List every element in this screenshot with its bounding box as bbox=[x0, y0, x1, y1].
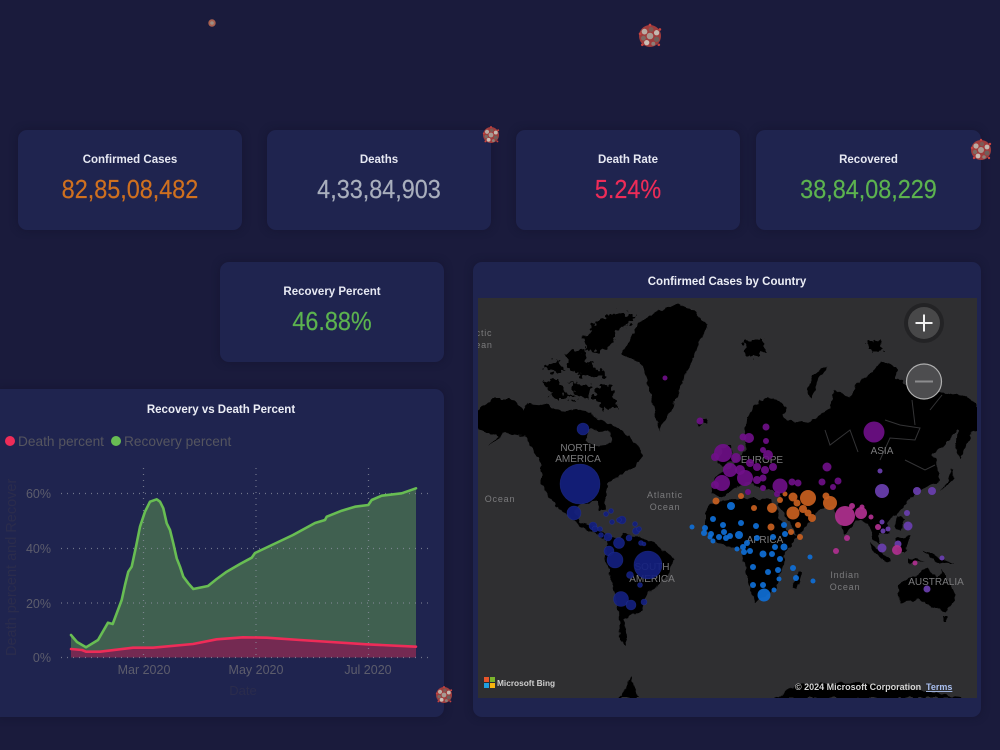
y axis labels: 60% bbox=[26, 487, 51, 501]
panel: recovery percent KPI bbox=[220, 262, 444, 362]
map place labels: NORTH bbox=[560, 443, 596, 454]
recovery percent line bbox=[71, 488, 416, 647]
value: recovery percent: 46.88% bbox=[292, 306, 372, 336]
x axis labels bbox=[118, 663, 392, 677]
death percent area bbox=[71, 637, 416, 658]
map place labels bbox=[475, 328, 964, 592]
y axis labels: 20% bbox=[26, 597, 51, 611]
icon: virus top right bbox=[639, 24, 661, 47]
icon: zoom in bbox=[904, 303, 944, 343]
x axis title: Date bbox=[229, 683, 257, 698]
map place labels: Indian bbox=[830, 570, 860, 580]
bubbles: Americas bbox=[560, 423, 662, 610]
map place labels: SOUTH bbox=[634, 562, 670, 573]
map: confirmed cases by country bbox=[475, 298, 980, 698]
bubbles: Europe and northern Asia bbox=[662, 376, 884, 497]
heading: death rate: Death Rate bbox=[598, 154, 658, 166]
recovery percent area bbox=[71, 488, 416, 658]
value: recovered: 38,84,08,229 bbox=[800, 174, 937, 204]
y axis title: Death percent and Recover bbox=[4, 479, 20, 656]
y axis labels: 0% bbox=[33, 651, 51, 665]
panel: recovery vs death chart card bbox=[0, 389, 444, 717]
map place labels: ean bbox=[475, 340, 493, 350]
map place labels: AFRICA bbox=[747, 535, 784, 546]
map place labels: Ocean bbox=[485, 494, 515, 504]
icon: virus small top bbox=[208, 19, 216, 27]
heading: recovery percent: Recovery Percent bbox=[283, 286, 381, 298]
map terms link: Terms bbox=[926, 682, 952, 692]
icon: virus on recovered card bbox=[971, 139, 991, 160]
x axis labels: May 2020 bbox=[229, 663, 283, 677]
map place labels: Ocean bbox=[830, 582, 860, 592]
map place labels: EUROPE bbox=[741, 455, 783, 466]
bubbles: South Asia bbox=[833, 503, 918, 566]
chart: recovery vs death percent bbox=[4, 404, 428, 698]
icon: virus near chart bbox=[436, 686, 452, 703]
panel: recovered KPI bbox=[756, 130, 981, 230]
value: deaths: 4,33,84,903 bbox=[317, 174, 441, 204]
map place labels: AMERICA bbox=[629, 574, 675, 585]
death percent line bbox=[71, 637, 416, 652]
map title: Confirmed Cases by Country bbox=[648, 276, 807, 288]
panel: confirmed cases KPI bbox=[18, 130, 242, 230]
map place labels: AMERICA bbox=[555, 454, 601, 465]
y axis labels: 40% bbox=[26, 542, 51, 556]
bubbles: Middle East bbox=[712, 490, 837, 540]
bubbles: East Asia and Oceania bbox=[875, 468, 944, 592]
value: confirmed cases: 82,85,08,482 bbox=[62, 174, 198, 204]
map place labels: AUSTRALIA bbox=[908, 577, 964, 588]
map place labels: ctic bbox=[476, 328, 492, 338]
heading: deaths: Deaths bbox=[360, 154, 398, 166]
x axis labels: Mar 2020 bbox=[118, 663, 170, 677]
chart title: Recovery vs Death Percent bbox=[147, 404, 295, 416]
map place labels: Ocean bbox=[650, 502, 680, 512]
icon: virus on deaths card bbox=[483, 126, 499, 143]
map place labels: ASIA bbox=[871, 446, 894, 457]
icon: Bing logo: Microsoft Bing bbox=[497, 678, 555, 688]
heading: confirmed cases: Confirmed Cases bbox=[83, 154, 177, 166]
arctic islands bbox=[541, 313, 883, 409]
chart legend: Death percent bbox=[18, 434, 104, 449]
panel: map card bbox=[473, 262, 981, 717]
panel: death rate KPI bbox=[516, 130, 740, 230]
chart legend bbox=[5, 434, 231, 449]
x axis labels: Jul 2020 bbox=[344, 663, 392, 677]
map copyright: © 2024 Microsoft Corporation bbox=[795, 682, 921, 692]
icon: zoom out bbox=[906, 364, 942, 399]
land masses bbox=[478, 304, 980, 698]
map place labels: Atlantic bbox=[647, 490, 683, 500]
heading: recovered: Recovered bbox=[839, 154, 898, 166]
panel: deaths KPI bbox=[267, 130, 491, 230]
chart legend: Recovery percent bbox=[124, 434, 231, 449]
value: death rate: 5.24% bbox=[595, 174, 661, 204]
y axis labels bbox=[26, 487, 51, 665]
bubbles: Africa bbox=[690, 502, 816, 602]
